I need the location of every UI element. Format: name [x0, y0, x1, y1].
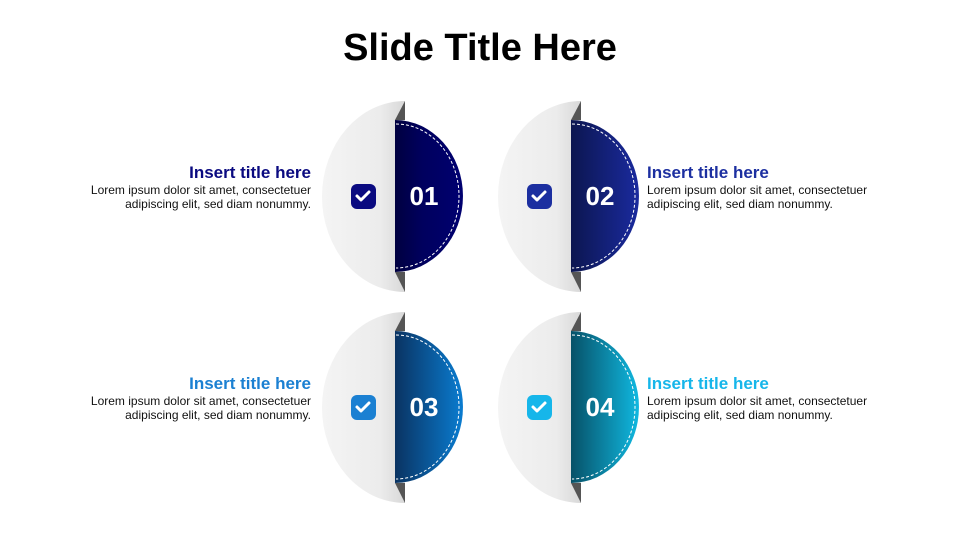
text 02 — [647, 163, 867, 211]
text 03: Lorem ipsum dolor sit amet, consectetuer — [91, 394, 311, 408]
item 01 shape — [322, 101, 463, 292]
text 01: Insert title here — [189, 163, 311, 182]
item 01 shape: 01 — [410, 181, 438, 211]
item 02 shape — [498, 101, 639, 292]
text 02: Insert title here — [647, 163, 769, 182]
text 04 — [647, 374, 867, 422]
text 04: adipiscing elit, sed diam nonummy. — [647, 408, 833, 422]
text 03: adipiscing elit, sed diam nonummy. — [125, 408, 311, 422]
text 03: Insert title here — [189, 374, 311, 393]
text 01: adipiscing elit, sed diam nonummy. — [125, 197, 311, 211]
text 02: Lorem ipsum dolor sit amet, consectetuer — [647, 183, 867, 197]
item 03 shape: 03 — [410, 392, 438, 422]
text 01: Lorem ipsum dolor sit amet, consectetuer — [91, 183, 311, 197]
text 04: Insert title here — [647, 374, 769, 393]
title: Slide Title Here — [343, 27, 617, 69]
text 03 — [91, 374, 311, 422]
text 02: adipiscing elit, sed diam nonummy. — [647, 197, 833, 211]
item 02 shape: 02 — [586, 181, 614, 211]
item 04 shape: 04 — [586, 392, 615, 422]
text 04: Lorem ipsum dolor sit amet, consectetuer — [647, 394, 867, 408]
text 01 — [91, 163, 311, 211]
item 04 shape — [498, 312, 639, 503]
item 03 shape — [322, 312, 463, 503]
